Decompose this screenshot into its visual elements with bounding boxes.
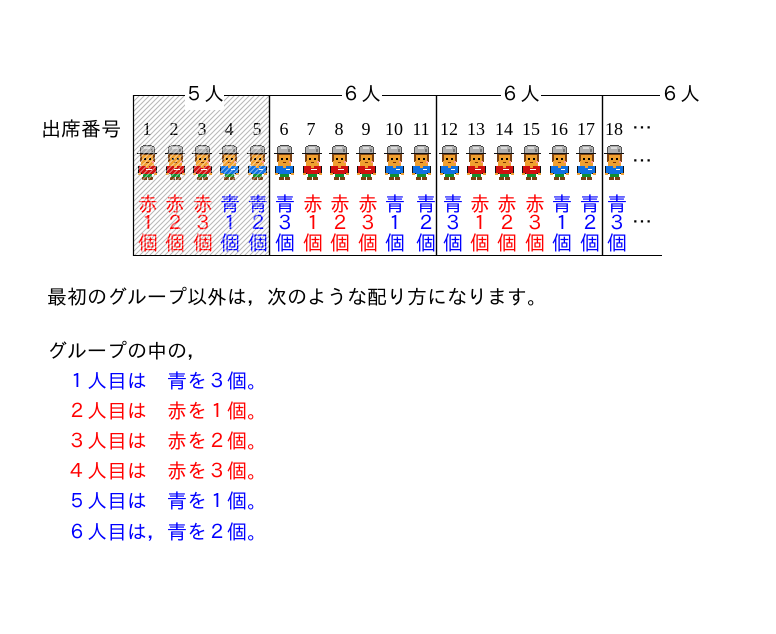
ball colour and count per student: 個 [138, 233, 158, 253]
ball colour and count per student: 個 [470, 233, 490, 253]
attendance numbers: 4 [224, 119, 234, 139]
attendance numbers: 1 [142, 119, 152, 139]
continuation dots: … [632, 151, 652, 171]
ball colour and count per student: 青 [275, 194, 295, 214]
distribution list: ５人目は 青を１個。 [67, 491, 267, 511]
ball colour and count per student: １ [385, 213, 405, 233]
ball colour and count per student: ２ [165, 213, 185, 233]
ball colour and count per student [138, 194, 627, 253]
ball colour and count per student: １ [303, 213, 323, 233]
ball colour and count per student: 青 [220, 194, 240, 214]
ball colour and count per student: 赤 [165, 194, 185, 214]
ball colour and count per student: 個 [497, 233, 517, 253]
ball colour and count per student: 赤 [303, 194, 323, 214]
ball colour and count per student: ２ [416, 213, 436, 233]
ball colour and count per student: 個 [165, 233, 185, 253]
ball colour and count per student: ３ [193, 213, 213, 233]
ball colour and count per student: ３ [607, 213, 627, 233]
ball colour and count per student: 赤 [138, 194, 158, 214]
ball colour and count per student: 個 [275, 233, 295, 253]
hatched first group background [134, 96, 269, 255]
ball colour and count per student: 赤 [525, 194, 545, 214]
attendance numbers: 18 [605, 119, 623, 139]
ball colour and count per student: 個 [303, 233, 323, 253]
ball colour and count per student: ２ [330, 213, 350, 233]
attendance numbers: 8 [334, 119, 344, 139]
attendance numbers: 9 [362, 119, 370, 139]
ball colour and count per student: 青 [607, 194, 627, 214]
continuation dots [632, 118, 652, 232]
ball colour and count per student: 赤 [358, 194, 378, 214]
attendance numbers [142, 119, 623, 139]
attendance numbers: 5 [252, 119, 262, 139]
ball colour and count per student: 青 [552, 194, 572, 214]
attendance numbers: 2 [170, 119, 178, 139]
ball colour and count per student: 青 [580, 194, 600, 214]
attendance numbers: 15 [522, 119, 540, 139]
distribution list: ４人目は 赤を３個。 [67, 461, 267, 481]
ball colour and count per student: 個 [552, 233, 572, 253]
ball colour and count per student: １ [470, 213, 490, 233]
ball colour and count per student: １ [220, 213, 240, 233]
row label: attendance number: 出席番号 [41, 119, 121, 139]
ball colour and count per student: 赤 [497, 194, 517, 214]
ball colour and count per student: 青 [248, 194, 268, 214]
ball colour and count per student: 個 [580, 233, 600, 253]
group size labels: ６人 [500, 84, 540, 104]
ball colour and count per student: ３ [275, 213, 295, 233]
ball colour and count per student: 個 [443, 233, 463, 253]
ball colour and count per student: 赤 [470, 194, 490, 214]
group size labels [184, 84, 700, 110]
ball colour and count per student: ２ [497, 213, 517, 233]
group frame lines [133, 95, 662, 256]
attendance numbers: 13 [467, 119, 485, 139]
distribution list: ６人目は，青を２個。 [67, 522, 267, 542]
attendance numbers: 17 [577, 119, 595, 139]
ball colour and count per student: 赤 [193, 194, 213, 214]
list heading: グループの中の， [47, 340, 207, 361]
attendance numbers: 10 [385, 119, 403, 139]
attendance numbers: 7 [306, 119, 316, 139]
ball colour and count per student: 青 [443, 194, 463, 214]
attendance numbers: 11 [412, 119, 430, 139]
ball colour and count per student: 個 [385, 233, 405, 253]
distribution list: ３人目は 赤を２個。 [67, 431, 267, 451]
ball colour and count per student: １ [138, 213, 158, 233]
group size labels: ６人 [660, 84, 700, 104]
ball colour and count per student: ３ [443, 213, 463, 233]
attendance numbers: 16 [550, 119, 568, 139]
ball colour and count per student: 個 [220, 233, 240, 253]
distribution list [67, 371, 267, 542]
ball colour and count per student: 個 [607, 233, 627, 253]
ball colour and count per student: 個 [330, 233, 350, 253]
attendance numbers: 3 [198, 119, 206, 139]
group size labels: ６人 [341, 84, 381, 104]
ball colour and count per student: ３ [358, 213, 378, 233]
ball colour and count per student: 個 [416, 233, 436, 253]
attendance numbers: 12 [440, 119, 458, 139]
ball colour and count per student: 赤 [330, 194, 350, 214]
attendance numbers: 14 [495, 119, 513, 139]
attendance numbers: 6 [280, 119, 288, 139]
explanation sentence: 最初のグループ以外は，次のような配り方になります。 [47, 286, 547, 307]
ball colour and count per student: 青 [385, 194, 405, 214]
row of student figures [137, 145, 624, 180]
continuation dots: … [632, 212, 652, 232]
ball colour and count per student: 個 [525, 233, 545, 253]
ball colour and count per student: 個 [358, 233, 378, 253]
ball colour and count per student: 個 [248, 233, 268, 253]
group size labels: ５人 [184, 84, 224, 104]
distribution list: ２人目は 赤を１個。 [67, 401, 267, 421]
ball colour and count per student: 個 [193, 233, 213, 253]
ball colour and count per student: ２ [248, 213, 268, 233]
continuation dots: … [632, 118, 652, 138]
ball colour and count per student: ３ [525, 213, 545, 233]
ball colour and count per student: 青 [416, 194, 436, 214]
ball colour and count per student: ２ [580, 213, 600, 233]
ball colour and count per student: １ [552, 213, 572, 233]
distribution list: １人目は 青を３個。 [67, 371, 267, 391]
hatch overlay across first group [135, 110, 269, 255]
